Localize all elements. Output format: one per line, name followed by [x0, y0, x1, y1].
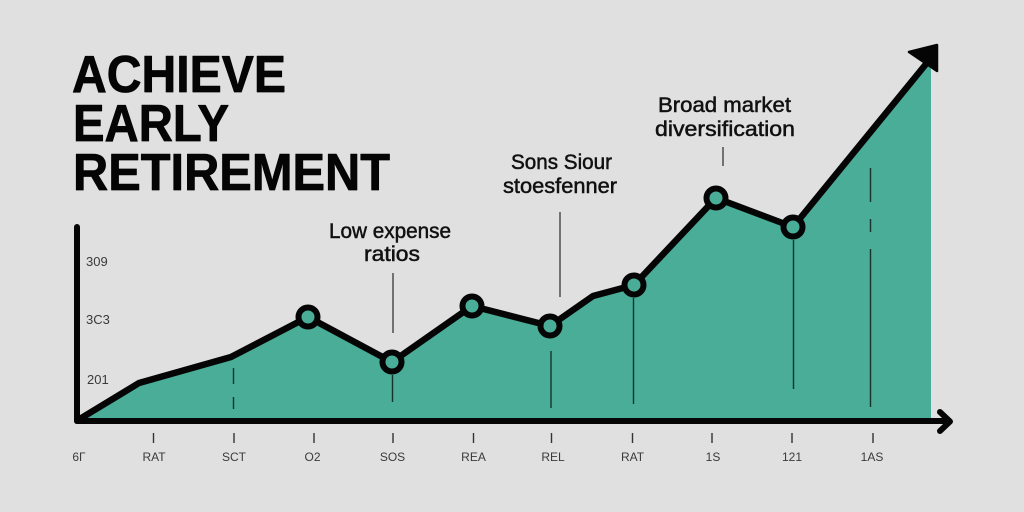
- callout: broad market diversification: Broad market: [658, 94, 791, 117]
- y axis labels: [86, 254, 110, 387]
- x axis labels: RAT: [142, 450, 166, 464]
- callout: broad market diversification: diversification: [655, 118, 795, 141]
- y axis labels: 3C3: [86, 312, 110, 327]
- y axis: [74, 227, 80, 421]
- x axis labels: REA: [461, 450, 486, 464]
- title: RETIREMENT: [73, 144, 390, 202]
- callout: low expense ratios: [329, 220, 451, 266]
- x axis labels: O2: [304, 450, 321, 464]
- title: [72, 46, 390, 202]
- x axis labels: 6Γ: [72, 450, 86, 464]
- x axis labels: SOS: [380, 450, 405, 464]
- callout: sons siour stoesfenner: stoesfenner: [503, 175, 617, 198]
- callout: sons siour stoesfenner: Sons Siour: [511, 151, 612, 174]
- callout: broad market diversification: [655, 94, 795, 141]
- area chart fill: [78, 62, 931, 420]
- callout: sons siour stoesfenner: [503, 151, 617, 198]
- title: EARLY: [73, 95, 229, 153]
- x axis labels: [72, 450, 883, 464]
- x axis arrow: [77, 412, 950, 431]
- x axis labels: 1S: [706, 450, 720, 464]
- growth line: [78, 64, 926, 420]
- x axis labels: SCT: [222, 450, 247, 464]
- callout: low expense ratios: Low expense: [329, 220, 451, 243]
- growth line arrowhead: [909, 45, 937, 71]
- x axis ticks: [154, 433, 873, 443]
- x axis labels: 1AS: [861, 450, 883, 464]
- y axis labels: 201: [87, 372, 109, 387]
- leader lines: [234, 147, 870, 409]
- callout: low expense ratios: ratios: [364, 243, 420, 266]
- x axis labels: REL: [541, 450, 565, 464]
- x axis labels: RAT: [621, 450, 645, 464]
- x axis labels: 121: [782, 450, 802, 464]
- data point markers: [298, 188, 802, 372]
- title: ACHIEVE: [72, 46, 286, 104]
- y axis labels: 309: [86, 254, 108, 269]
